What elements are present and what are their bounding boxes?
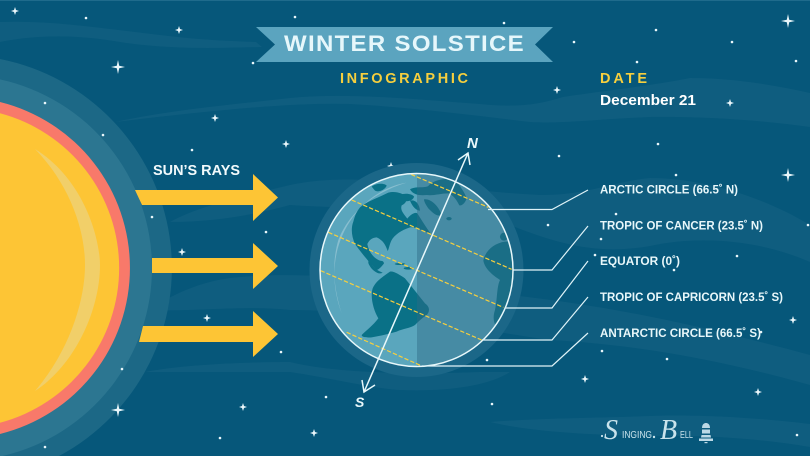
dark hemisphere [417, 174, 512, 366]
watermark logo: INGING [622, 430, 652, 441]
latitude labels [600, 184, 783, 340]
arrow: middle ray [152, 243, 278, 289]
earth globe [310, 135, 524, 410]
icon: bell [699, 423, 713, 443]
sun [0, 59, 172, 456]
globe highlight [334, 183, 407, 313]
south label: S [355, 394, 365, 410]
sun's rays label: SUN’S RAYS [153, 162, 240, 179]
date block: DATE [600, 71, 647, 87]
latitude labels: ARCTIC CIRCLE (66.5˚ N) [600, 184, 738, 196]
earth axis arrow [362, 153, 470, 392]
watermark logo: ELL [680, 430, 693, 441]
date block: December 21 [600, 93, 696, 109]
title ribbon [256, 27, 553, 62]
title: WINTER SOLSTICE [284, 31, 525, 56]
latitude labels: TROPIC OF CAPRICORN (23.5˚ S) [600, 292, 783, 304]
arrow: top ray [135, 174, 278, 221]
watermark logo [601, 415, 713, 446]
latitude labels: TROPIC OF CANCER (23.5˚ N) [600, 220, 763, 232]
latitude lines [321, 174, 512, 366]
arrow: bottom ray [139, 311, 278, 357]
latitude labels: ANTARCTIC CIRCLE (66.5˚ S) [600, 328, 761, 340]
watermark logo: S [604, 415, 618, 446]
land masses [352, 179, 520, 337]
subtitle: INFOGRAPHIC [340, 71, 469, 87]
watermark logo: B [660, 415, 677, 446]
date block [600, 71, 696, 109]
north label: N [467, 135, 479, 152]
latitude labels: EQUATOR (0˚) [600, 256, 680, 268]
connector lines [422, 190, 588, 366]
